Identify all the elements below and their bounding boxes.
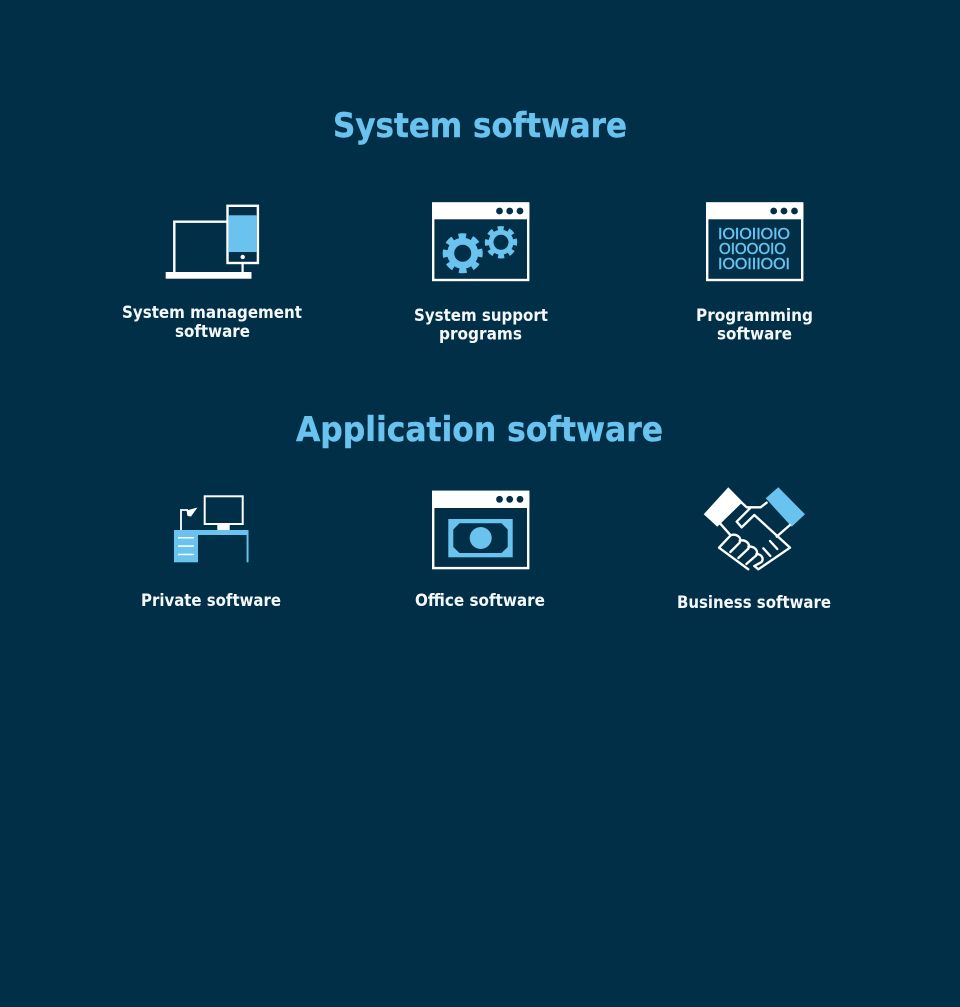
icon: handshake (704, 487, 805, 569)
label: System support programs: programs (439, 324, 522, 344)
label: System management software: System management (122, 303, 302, 323)
label: Programming software (696, 306, 813, 344)
label: Programming software: Programming (696, 306, 813, 326)
label: Business software: Business software (677, 593, 831, 613)
icon: window with banknote (432, 491, 529, 568)
icon: window with binary code (706, 202, 803, 280)
heading: System software: System software (333, 106, 627, 146)
icon: window with binary code: IOOIIIOOI (718, 256, 790, 273)
icon: window with binary code: OIOOOIO (719, 241, 786, 258)
label: System management software: software (175, 322, 250, 342)
label: System support programs (414, 306, 548, 344)
icon: desk with monitor and lamp (174, 496, 248, 562)
icon: window with gears (432, 202, 529, 280)
icon: laptop and phone (166, 206, 258, 279)
icon: window with binary code: IOIOIIOIO (718, 226, 790, 243)
label: System management software (122, 303, 302, 342)
label: Programming software: software (717, 324, 792, 344)
label: System support programs: System support (414, 306, 548, 326)
label: Private software: Private software (141, 591, 281, 611)
label: Office software: Office software (415, 591, 545, 611)
heading: Application software: Application software (296, 410, 663, 450)
